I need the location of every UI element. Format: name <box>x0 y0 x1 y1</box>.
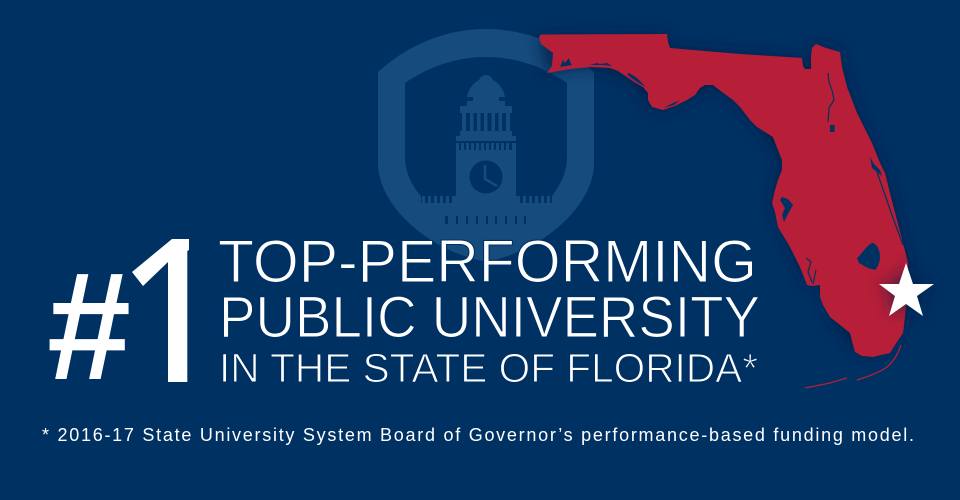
headline line 1: TOP-PERFORMING <box>218 228 757 295</box>
headline line 2: PUBLIC UNIVERSITY <box>219 285 760 350</box>
base slits <box>445 216 526 224</box>
clock face <box>470 160 502 194</box>
digit one: 1 <box>126 191 218 459</box>
clock hands <box>485 165 497 186</box>
map: florida <box>539 34 908 388</box>
bays and rivers <box>560 58 793 222</box>
shield outline <box>378 29 594 262</box>
headline line 3: IN THE STATE OF FLORIDA* <box>219 345 758 391</box>
footnote: * 2016-17 State University System Board of Governor’s performance-based funding model. <box>42 425 914 445</box>
icon: white star <box>879 263 934 316</box>
florida keys <box>805 345 901 388</box>
hash symbol: # <box>47 240 131 412</box>
rank number <box>50 239 189 382</box>
icon: university shield with clock tower <box>378 29 594 262</box>
star shadow <box>879 263 934 316</box>
river lake <box>830 125 834 132</box>
state shape <box>539 34 908 357</box>
lake okeechobee <box>857 243 880 270</box>
headline <box>218 228 760 391</box>
clock tower <box>422 75 550 204</box>
digit one flag <box>132 239 189 286</box>
indian river lagoon <box>870 157 882 176</box>
shadow of florida map <box>539 34 908 357</box>
